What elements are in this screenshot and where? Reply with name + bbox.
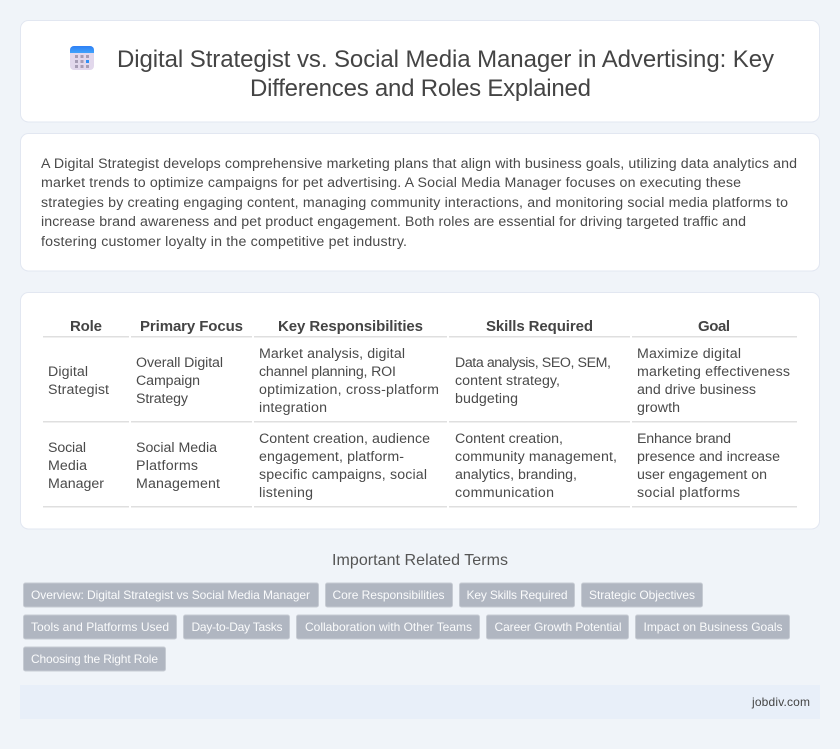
- tag: Career Growth Potential: [494, 620, 622, 634]
- table row: Social Media Manager: Social: [48, 440, 86, 456]
- description paragraph: A Digital Strategist develops comprehensive marketing plans that align with business goals, utilizing data analytics and: [41, 156, 797, 172]
- table row: Social Media Manager: presence and increase: [637, 449, 780, 465]
- table row: Digital Strategist: Digital: [48, 364, 88, 380]
- tag: [326, 583, 452, 607]
- title: Digital Strategist vs. Social Media Manager in Advertising: Key: [117, 46, 774, 73]
- description paragraph: [41, 156, 797, 250]
- table header row: Goal: [698, 318, 730, 335]
- description paragraph: strategies by creating engaging content, managing community interactions, and monitoring social media platforms to: [41, 195, 788, 211]
- tag: [636, 615, 790, 639]
- panel: comparison table: [20, 292, 820, 529]
- table row: Digital Strategist: Overall Digital: [136, 355, 223, 371]
- table row: Digital Strategist: growth: [637, 400, 680, 416]
- table row: Social Media Manager: listening: [259, 485, 313, 501]
- tag: [460, 583, 574, 607]
- table row: Digital Strategist: Market analysis, digital: [259, 346, 405, 362]
- footer: [20, 685, 820, 719]
- description paragraph: fostering customer loyalty in the competitive pet industry.: [41, 234, 407, 250]
- tag: [486, 615, 628, 639]
- tag: Day-to-Day Tasks: [192, 620, 282, 634]
- table row: Digital Strategist: [43, 346, 797, 422]
- table row: Digital Strategist: Data analysis, SEO, SEM,: [455, 355, 611, 371]
- table row: Social Media Manager: Content creation,: [455, 431, 563, 447]
- description paragraph: increase brand awareness and pet product engagement. Both roles are essential for driving targeted traffic and: [41, 214, 746, 230]
- tag: Overview: Digital Strategist vs Social Media Manager: [31, 588, 310, 602]
- table header row: Skills Required: [486, 318, 593, 335]
- tag: [184, 615, 290, 639]
- title: Differences and Roles Explained: [250, 75, 591, 102]
- table row: Digital Strategist: budgeting: [455, 391, 518, 407]
- tag: [24, 615, 176, 639]
- tag: [24, 647, 166, 671]
- tag: Key Skills Required: [466, 588, 568, 602]
- table row: Digital Strategist: Campaign: [136, 373, 200, 389]
- header panel: [20, 20, 820, 122]
- table row: Digital Strategist: integration: [259, 400, 327, 416]
- footer: jobdiv.com: [751, 695, 810, 709]
- table row: Digital Strategist: content strategy,: [455, 373, 560, 389]
- table row: Social Media Manager: Media: [48, 458, 87, 474]
- table row: Digital Strategist: Strategist: [48, 382, 109, 398]
- heading: related terms: Important Related Terms: [332, 552, 508, 569]
- tag: Strategic Objectives: [589, 588, 695, 602]
- tag: [296, 615, 480, 639]
- title: [117, 46, 774, 102]
- icon: calendar: [70, 46, 94, 70]
- tag: [24, 583, 318, 607]
- table row: Social Media Manager: analytics, branding,: [455, 467, 577, 483]
- table row: Social Media Manager: social platforms: [637, 485, 740, 501]
- table row: Social Media Manager: Social Media: [136, 440, 217, 456]
- table row: Social Media Manager: Management: [136, 476, 220, 492]
- related term tags: [24, 583, 790, 671]
- table header row: [43, 318, 797, 338]
- panel: description: [20, 134, 820, 271]
- table row: Social Media Manager: communication: [455, 485, 554, 501]
- description paragraph: market trends to optimize campaigns for pet advertising. A Social Media Manager focuses on executing these: [41, 175, 741, 191]
- table row: Social Media Manager: Manager: [48, 476, 104, 492]
- table row: Social Media Manager: specific campaigns, social: [259, 467, 427, 483]
- table row: Digital Strategist: and drive business: [637, 382, 756, 398]
- table row: Social Media Manager: Platforms: [136, 458, 198, 474]
- tag: Choosing the Right Role: [31, 652, 158, 666]
- tag: Impact on Business Goals: [644, 620, 782, 634]
- table row: Digital Strategist: optimization, cross-platform: [259, 382, 439, 398]
- table row: Digital Strategist: Maximize digital: [637, 346, 741, 362]
- tag: [582, 583, 702, 607]
- table row: Social Media Manager: community management,: [455, 449, 617, 465]
- table header row: Primary Focus: [140, 318, 243, 335]
- tag: Collaboration with Other Teams: [305, 620, 472, 634]
- table row: Social Media Manager: user engagement on: [637, 467, 767, 483]
- table row: Social Media Manager: engagement, platform-: [259, 449, 404, 465]
- table header row: Role: [70, 318, 102, 335]
- table row: Social Media Manager: Enhance brand: [637, 431, 731, 447]
- table row: Digital Strategist: Strategy: [136, 391, 189, 407]
- table row: Digital Strategist: marketing effectiveness: [637, 364, 790, 380]
- tag: Core Responsibilities: [332, 588, 444, 602]
- tag: Tools and Platforms Used: [31, 620, 169, 634]
- table row: Digital Strategist: channel planning, ROI: [259, 364, 396, 380]
- table row: Social Media Manager: [43, 431, 797, 508]
- table header row: Key Responsibilities: [278, 318, 423, 335]
- table row: Social Media Manager: Content creation, audience: [259, 431, 430, 447]
